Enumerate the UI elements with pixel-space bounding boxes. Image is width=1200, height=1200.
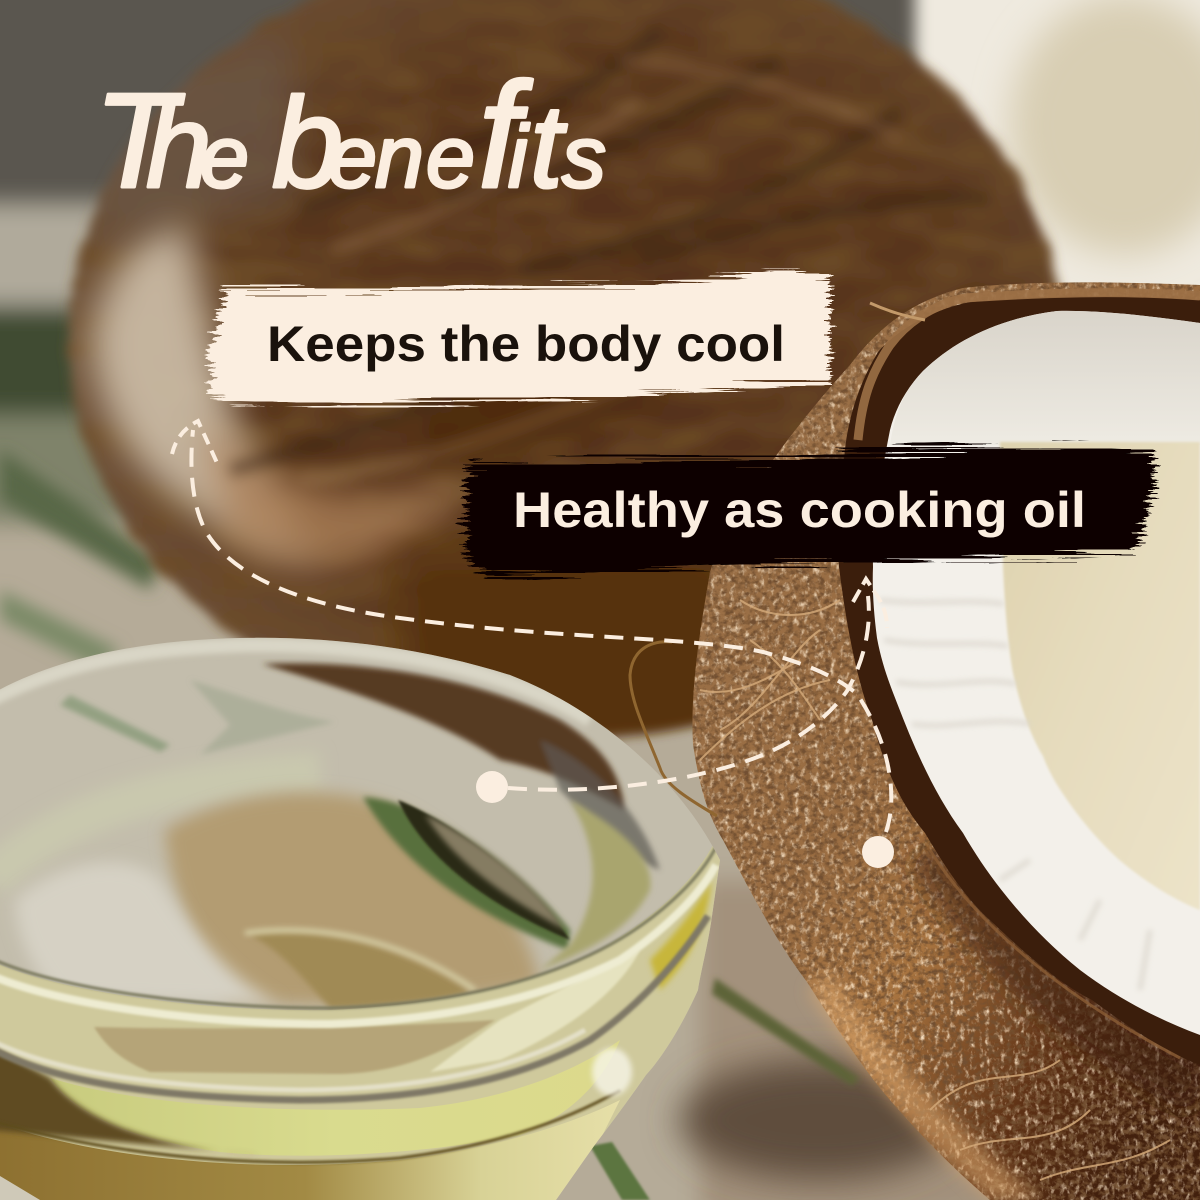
heading: t bbox=[530, 81, 567, 213]
brush stroke: light bbox=[208, 272, 830, 406]
heading: n bbox=[375, 107, 424, 206]
heading: b bbox=[272, 72, 343, 215]
callout: keeps the body cool: Keeps the body cool bbox=[267, 316, 785, 372]
hanging fibre bbox=[630, 642, 717, 816]
pale husk outer edge bbox=[808, 970, 1040, 1200]
callout: healthy as cooking oil: Healthy as cooking oil bbox=[513, 482, 1086, 538]
yellow glint bbox=[650, 880, 712, 990]
coconut half bbox=[692, 282, 1200, 1200]
heading: s bbox=[562, 107, 606, 206]
front glass wall bbox=[0, 846, 720, 1165]
coconut cavity bbox=[1000, 442, 1200, 910]
coconut flesh bbox=[873, 311, 1200, 1035]
oil floor bbox=[165, 793, 540, 1005]
heading: f bbox=[478, 51, 533, 219]
flesh ridges bbox=[880, 600, 1150, 990]
loose fibres bbox=[700, 600, 1170, 1180]
arrow: to healthy as cooking oil bbox=[508, 579, 887, 790]
under band bbox=[0, 1100, 620, 1200]
glass rim highlights bbox=[0, 845, 717, 1162]
marker dot: oil bowl bbox=[476, 771, 508, 803]
heading: i bbox=[508, 107, 530, 206]
callout: keeps the body cool bbox=[208, 272, 830, 406]
glass window bbox=[94, 1020, 495, 1074]
top right bowl bbox=[915, 0, 1200, 310]
callout: healthy as cooking oil bbox=[464, 446, 1156, 578]
blurred whole coconut bbox=[60, 0, 1070, 750]
heading: e bbox=[426, 107, 475, 206]
reflections behind glass bbox=[0, 645, 660, 870]
husk bbox=[692, 282, 1200, 1200]
glass bowl of oil bbox=[0, 630, 730, 1200]
heading: e bbox=[328, 107, 377, 206]
lens reflection bbox=[250, 932, 470, 1008]
brush stroke: dark bbox=[464, 446, 1156, 578]
pale left edge bbox=[90, 210, 330, 560]
yellow right glass bbox=[540, 800, 651, 970]
fibre tuft on rim bbox=[870, 303, 925, 320]
leaf reflection bbox=[363, 797, 570, 950]
heading: e bbox=[200, 107, 249, 206]
heading: h bbox=[146, 81, 212, 213]
lime oil band bbox=[50, 1040, 620, 1156]
marker dot: coconut bbox=[862, 836, 894, 868]
heading: T bbox=[94, 65, 185, 216]
dark husk near rim bbox=[930, 850, 1200, 1090]
shell rim bbox=[839, 296, 1200, 1065]
arrow: to keeps the body cool bbox=[172, 421, 891, 832]
